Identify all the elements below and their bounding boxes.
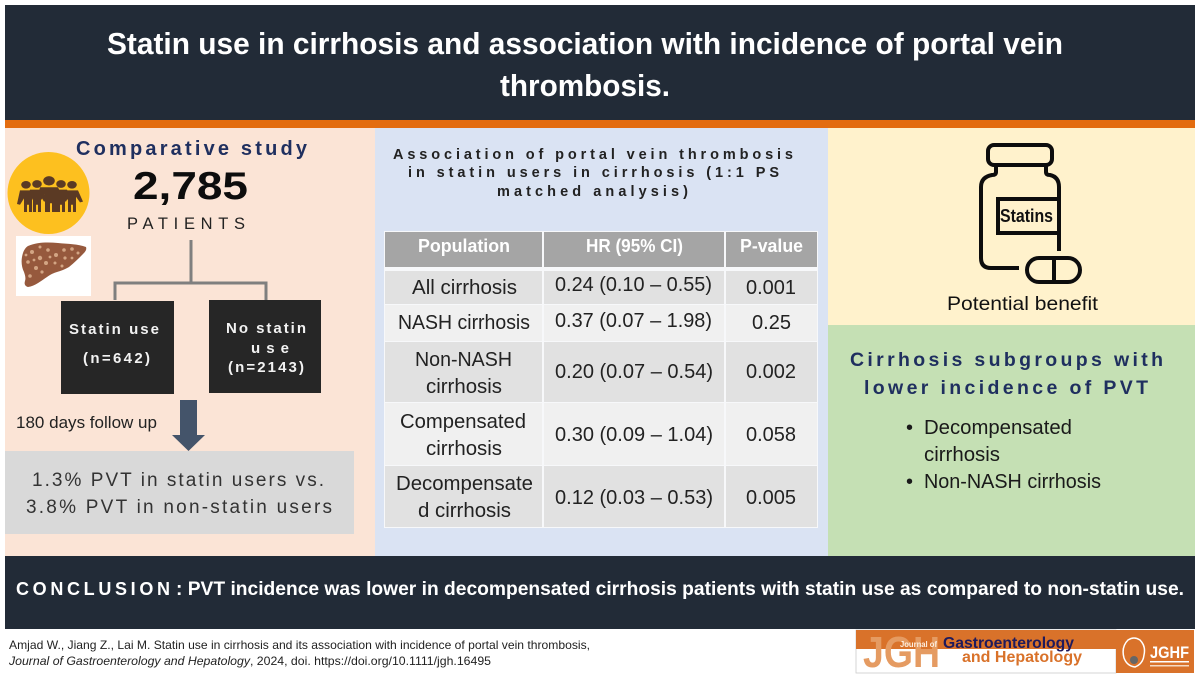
title: Statin use in cirrhosis and association with incidence of portal vein — [107, 26, 1063, 61]
heading: comparative study: Comparative study — [76, 138, 308, 160]
table body text: NASH cirrhosis — [398, 311, 530, 334]
logo: JGHF emblem: JGHF — [1150, 643, 1189, 662]
box: no statin use: No statin — [226, 320, 306, 337]
table body text: cirrhosis — [426, 375, 502, 398]
table body text: All cirrhosis — [412, 276, 517, 299]
conclusion banner: : PVT incidence was lower in decompensated cirrhosis patients with statin use as compared to non-statin use. — [176, 578, 1184, 600]
panel: association table — [375, 128, 828, 556]
table header row — [418, 236, 803, 256]
results table — [384, 231, 818, 528]
subgroup heading: lower incidence of PVT — [864, 377, 1148, 399]
box: no statin use: (n=2143) — [228, 359, 304, 376]
result box: 1.3% PVT in statin users vs. — [32, 470, 324, 491]
logo: JGHF emblem — [1123, 638, 1189, 667]
table heading — [393, 147, 793, 200]
result box: 3.8% PVT in non-statin users — [26, 497, 332, 518]
table body text: Compensated — [400, 410, 526, 433]
box: no statin use: use — [251, 340, 289, 357]
arrow: down — [172, 400, 205, 451]
table body text: 0.001 — [746, 276, 796, 299]
box: statin use — [61, 301, 174, 394]
icon: cirrhotic liver — [16, 236, 91, 296]
table body text: 0.005 — [746, 486, 796, 509]
journal logo — [856, 628, 1194, 677]
title: thrombosis. — [500, 68, 670, 103]
bottle label: Statins — [1000, 206, 1053, 226]
panel: potential benefit — [828, 128, 1195, 325]
table heading: matched analysis) — [497, 184, 688, 200]
box: statin use: (n=642) — [83, 350, 150, 367]
table body text — [396, 273, 796, 522]
icon: group of people — [8, 152, 90, 234]
title — [107, 26, 1063, 103]
tree connector — [115, 240, 266, 300]
table body text: Non-NASH — [415, 348, 512, 371]
subgroup list: cirrhosis — [924, 444, 1000, 466]
journal logo: Journal of — [900, 640, 937, 649]
icon: statin bottle with pill — [981, 145, 1080, 282]
table header row: P-value — [740, 236, 803, 256]
subgroup heading — [850, 349, 1163, 399]
header banner — [5, 5, 1195, 128]
journal logo: and Hepatology — [962, 649, 1082, 666]
table heading: in statin users in cirrhosis (1:1 PS — [408, 165, 779, 181]
subgroup list: Non-NASH cirrhosis — [924, 471, 1101, 493]
table body text: d cirrhosis — [418, 499, 511, 522]
citation — [8, 638, 590, 668]
table heading: Association of portal vein thrombosis — [393, 147, 793, 163]
table body text: 0.002 — [746, 360, 796, 383]
journal logo: Gastroenterology — [943, 635, 1074, 652]
subgroup list: • — [906, 417, 913, 439]
conclusion banner — [5, 556, 1195, 629]
citation: Amjad W., Jiang Z., Lai M. Statin use in cirrhosis and its association with incidence of portal vein thrombosis, — [9, 638, 590, 652]
subgroup list: Decompensated — [924, 417, 1072, 439]
conclusion banner: CONCLUSION — [16, 579, 170, 599]
table body text: 0.20 (0.07 – 0.54) — [555, 360, 713, 383]
patients label: PATIENTS — [127, 215, 245, 233]
logo: JGH letters: JGH — [863, 628, 940, 677]
subgroup list: • — [906, 471, 913, 493]
subgroup list — [906, 417, 1101, 493]
table body text: 0.37 (0.07 – 1.98) — [555, 309, 712, 332]
box: statin use: Statin use — [69, 321, 159, 338]
table body text: 0.30 (0.09 – 1.04) — [555, 423, 713, 446]
caption: Potential benefit — [947, 293, 1099, 315]
patient count: 2,785 — [133, 165, 248, 208]
panel: cirrhosis subgroups — [828, 325, 1195, 556]
table body text: Decompensate — [396, 472, 533, 495]
table body text: cirrhosis — [426, 437, 502, 460]
box: no statin use — [209, 300, 321, 393]
result box — [5, 451, 354, 534]
citation: Journal of Gastroenterology and Hepatology , 2024, doi. https://doi.org/10.1111/jgh.16495 — [8, 654, 491, 668]
subgroup heading: Cirrhosis subgroups with — [850, 349, 1163, 371]
table body text: 0.12 (0.03 – 0.53) — [555, 486, 713, 509]
table body text: 0.24 (0.10 – 0.55) — [555, 273, 712, 296]
table body text: 0.25 — [752, 311, 791, 334]
table body text: 0.058 — [746, 423, 796, 446]
table header row: HR (95% CI) — [586, 236, 683, 256]
table header row: Population — [418, 236, 510, 256]
panel: study design — [5, 128, 375, 556]
follow-up label: 180 days follow up — [16, 413, 157, 432]
